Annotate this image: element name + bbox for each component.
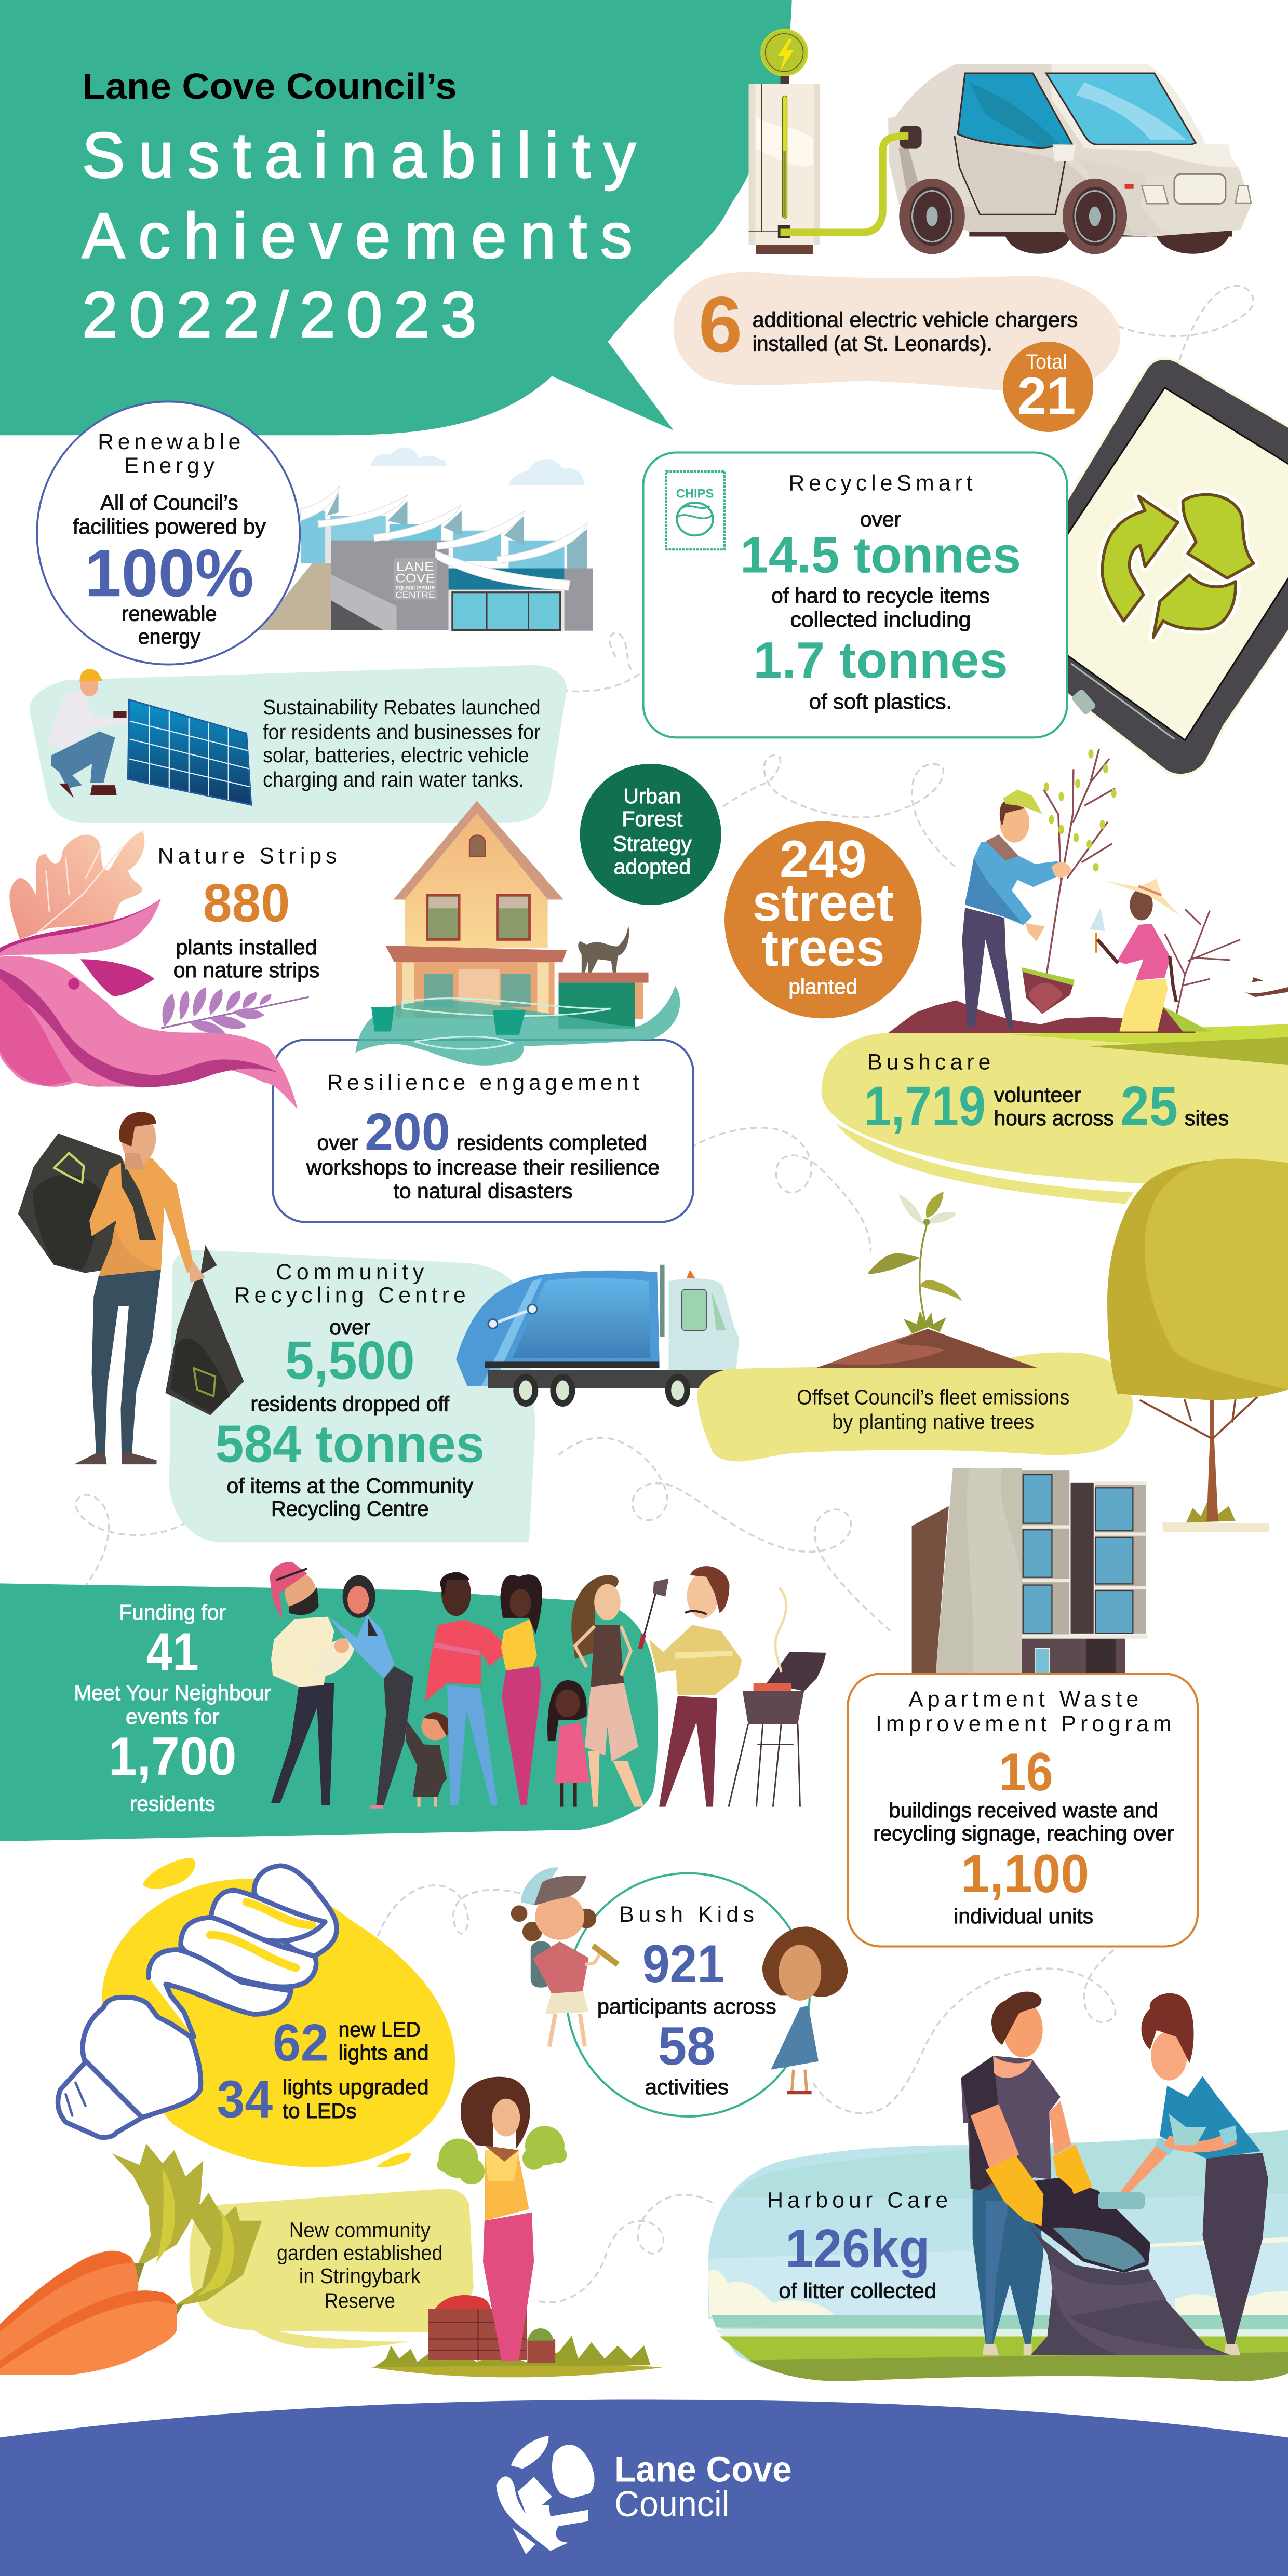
panel: street trees: planted [788,975,857,999]
panel: street trees: street [753,873,894,932]
panel: offset emissions: by planting native trees [832,1410,1034,1434]
icon: group of neighbours [270,1562,826,1809]
council logo [496,2436,792,2554]
panel: LED lights: new LED [339,2017,421,2041]
total badge [1003,342,1093,432]
icon: recycling truck [456,1265,739,1407]
icon: carrots [0,2143,262,2375]
panel: RecycleSmart: 14.5 tonnes [740,526,1021,583]
broccoli held [437,2126,567,2184]
panel: Apartment Waste Improvement Program: recycling signage, reaching over [873,1821,1174,1845]
logo mark [496,2436,595,2554]
panel: Bush Kids: 921 [642,1934,725,1994]
panel: Urban Forest Strategy: adopted [613,855,691,879]
panel: community garden [190,2189,474,2348]
panel: offset emissions: Offset Council’s fleet emissions [797,1385,1069,1409]
panel: Meet Your Neighbour: Meet Your Neighbour [74,1681,271,1705]
icon: apartment building [912,1468,1148,1673]
panel: Renewable Energy [37,401,300,665]
panel: LED lights: 62 [273,2013,329,2072]
title: Lane Cove Council’s [82,66,457,106]
person 1 [270,1562,361,1805]
panel: street trees [725,821,922,1018]
panel: Bush Kids [567,1873,810,2116]
title: Sustainability [82,120,636,192]
panel: Apartment Waste Improvement Program: buildings received waste and [889,1798,1158,1822]
icon: man carrying recycling bags [18,1112,244,1464]
icon: aquatic centre building: COVE [395,572,435,585]
icon: flooded house [356,801,680,1066]
panel: Bushcare: Bushcare [867,1049,990,1074]
charging cable [781,136,908,233]
panel: Renewable Energy: energy [138,625,200,649]
panel: RecycleSmart: 1.7 tonnes [753,631,1008,689]
panel: street trees: trees [761,919,884,977]
panel: Resilience engagement: workshops to increase their resilience [306,1155,660,1179]
panel: Harbour Care: Harbour Care [767,2188,948,2213]
panel: RecycleSmart: over [860,507,901,531]
panel: Urban Forest Strategy [580,764,721,905]
panel: Apartment Waste Improvement Program: Apartment Waste [908,1687,1138,1712]
panel: Bush Kids: activities [645,2075,729,2099]
person 5 [571,1575,644,1807]
panel: Urban Forest Strategy: Strategy [613,832,692,856]
icon: tree [1107,1159,1288,1532]
panel: Resilience engagement: 200 [365,1102,450,1161]
panel: Sustainability Rebates [30,665,567,823]
person 2 [328,1575,413,1809]
person 3 [425,1572,510,1805]
woman gardening [1090,879,1180,1032]
panel: Sustainability Rebates: for residents and businesses for [263,720,541,744]
panel: EV chargers: additional electric vehicle chargers [753,308,1078,332]
icon: electric car [781,64,1251,254]
panel: Urban Forest Strategy: Forest [622,807,683,831]
panel: LED lights: 34 [217,2070,273,2128]
person 8 boy [406,1712,451,1807]
council logo: Council [614,2484,729,2524]
panel: RecycleSmart: RecycleSmart [788,470,973,495]
panel: Nature Strips: Nature Strips [158,843,337,868]
panel: Community Recycling Centre [169,1250,535,1542]
panel: community garden: in Stringybark [299,2264,421,2288]
panel: Community Recycling Centre: 584 tonnes [215,1414,485,1473]
panel: Harbour Care: of litter collected [779,2278,936,2302]
panel: Urban Forest Strategy: Urban [623,784,681,808]
total badge: 21 [1017,367,1076,425]
panel: Apartment Waste Improvement Program: individual units [954,1904,1093,1928]
panel: Community Recycling Centre: Community [276,1260,424,1285]
sapling [1044,749,1117,975]
panel: LED lights [58,1858,455,2167]
panel: community garden: New community [289,2218,431,2242]
panel: Resilience engagement: residents completed [457,1130,647,1154]
icon: EV charger [749,30,820,254]
rubbish bag [986,2145,1231,2355]
panel: LED lights: lights and [339,2041,429,2065]
panel: Bushcare: hours across [994,1106,1114,1130]
panel: Meet Your Neighbour: residents [130,1792,215,1816]
panel: Bushcare: 25 [1120,1075,1178,1137]
icon: girl with glasses [762,1926,848,2094]
icon: chips packet: CHIPS [676,487,714,501]
icon: LED bulb [58,1866,337,2137]
panel: Bush Kids: participants across [597,1994,776,2018]
panel: street trees: 249 [780,830,867,888]
title: Achievements [82,200,633,272]
icon: aquatic centre building [258,447,593,631]
icon: aquatic centre building: LANE [396,560,434,574]
yellow gloves [986,2145,1092,2226]
panel: Sustainability Rebates: charging and rain water tanks. [263,767,524,791]
panel: Community Recycling Centre: Recycling Centre [271,1497,429,1521]
volunteer woman [1113,1993,1268,2355]
panel: Meet Your Neighbour [0,1583,658,1841]
panel: Nature Strips [158,843,337,982]
person 6 [638,1566,742,1807]
decorative dashed squiggles [44,286,1254,2302]
panel: Meet Your Neighbour: 41 [146,1622,199,1682]
panel: Nature Strips: on nature strips [173,958,319,982]
volunteer man [961,1992,1071,2355]
panel: LED lights: lights upgraded [283,2075,429,2099]
panel: Harbour Care: 126kg [785,2218,930,2278]
panel: Community Recycling Centre: residents dropped off [250,1392,450,1415]
panel: Resilience engagement: to natural disasters [394,1179,572,1203]
panel: EV chargers: 6 [699,281,742,369]
panel: Meet Your Neighbour: Funding for [119,1600,226,1624]
icon: barbecue [729,1588,826,1807]
panel: Apartment Waste Improvement Program [848,1674,1198,1946]
icon: sprout on mound [815,1192,1038,1368]
panel: Renewable Energy: Energy [124,453,214,478]
panel: Harbour Care [708,2130,1288,2381]
panel: Community Recycling Centre: over [329,1315,370,1339]
icon: chips packet [666,471,725,549]
icon: recycle arrows [1102,495,1254,637]
panel: Nature Strips: plants installed [176,935,317,959]
panel: RecycleSmart: of soft plastics. [809,690,952,713]
panel: community garden: Reserve [325,2288,395,2312]
icon: gardener with crate [370,2077,663,2377]
panel: community garden: garden established [277,2241,442,2265]
panel: Renewable Energy: All of Council’s [100,491,238,515]
panel: Bushcare: sites [1185,1106,1229,1130]
icon: solar worker [48,669,251,805]
panel: offset emissions [697,1353,1133,1461]
panel: EV chargers [674,272,1120,432]
title: 2022/2023 [82,279,476,350]
cat [578,925,629,973]
panel: Bush Kids: 58 [658,2016,716,2076]
icon: harbour clean-up volunteers [961,1992,1268,2355]
panel: LED lights: to LEDs [283,2099,356,2123]
panel: Community Recycling Centre: of items at the Community [227,1474,473,1498]
panel: Sustainability Rebates: solar, batteries, electric vehicle [263,743,529,767]
footer band [0,2400,1288,2576]
panel: Resilience engagement: over [317,1130,358,1154]
panel: RecycleSmart: of hard to recycle items [771,584,990,608]
man planting [962,790,1071,1029]
panel: Bushcare: volunteer [994,1083,1081,1107]
panel: Apartment Waste Improvement Program: 1,100 [961,1844,1089,1904]
panel: Bushcare [822,1024,1288,1204]
panel: Community Recycling Centre: Recycling Centre [234,1283,466,1307]
total badge: Total [1026,350,1067,373]
panel: Sustainability Rebates: Sustainability Rebates launched [263,695,541,719]
person 7 girl [547,1680,589,1807]
panel: Apartment Waste Improvement Program: Improvement Program [876,1711,1171,1736]
icon: aquatic centre building: aquatic leisure [395,584,435,591]
flood water [356,986,680,1066]
icon: tablet [1051,359,1288,775]
icon: aquatic centre building: CENTRE [395,589,435,600]
panel: Nature Strips: 880 [203,873,290,934]
panel: Resilience engagement: Resilience engagement [327,1070,639,1095]
panel: Apartment Waste Improvement Program: 16 [999,1742,1053,1802]
panel: RecycleSmart: collected including [790,608,971,631]
icon: kid with binoculars [511,1867,618,2046]
title speech bubble [0,0,792,435]
panel: Bushcare: 1,719 [864,1075,986,1137]
panel: Meet Your Neighbour: events for [126,1705,219,1729]
panel: Resilience engagement [273,1040,693,1222]
person 4 [500,1574,542,1805]
icon: tree planters [888,749,1288,1033]
panel: Renewable Energy: renewable [122,602,217,626]
panel: RecycleSmart [643,453,1067,737]
council logo: Lane Cove [614,2449,792,2490]
panel: Community Recycling Centre: 5,500 [285,1331,415,1391]
panel: EV chargers: installed (at St. Leonards). [753,331,992,355]
panel: Renewable Energy: Renewable [98,429,240,454]
panel: Bush Kids: Bush Kids [620,1902,754,1927]
panel: Renewable Energy: facilities powered by [73,515,266,538]
icon: nature strips foliage [0,831,309,1109]
panel: Meet Your Neighbour: 1,700 [109,1727,237,1787]
panel: Renewable Energy: 100% [85,536,254,611]
title [82,66,636,350]
